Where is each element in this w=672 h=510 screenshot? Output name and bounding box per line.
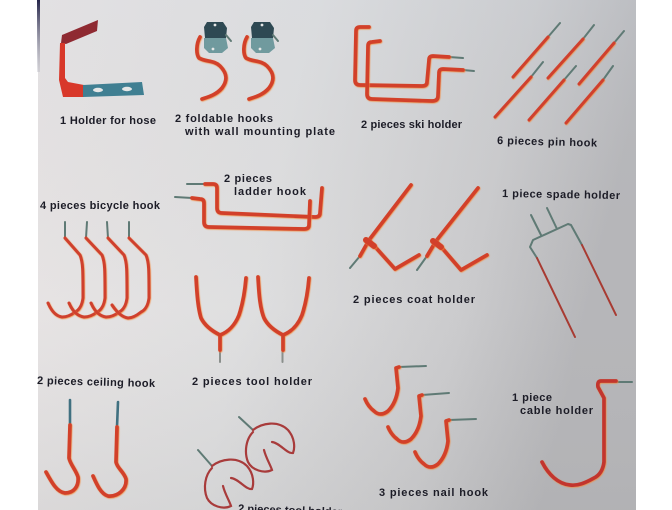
icon: holder for hose — [59, 20, 144, 97]
label: spade holder: 1 piece spade holder — [502, 188, 621, 202]
icon: ladder hooks — [175, 184, 322, 229]
icon: coat holders — [350, 185, 487, 270]
icon: spade holder — [530, 208, 616, 337]
icon: nail hooks — [365, 366, 476, 467]
icon: round tool hooks — [198, 417, 294, 508]
icon: pin hooks — [495, 23, 624, 123]
label: cable holder — [512, 392, 594, 417]
label: bicycle hook: 4 pieces bicycle hook — [40, 200, 161, 212]
label: foldable hooks: with wall mounting plate — [184, 126, 335, 138]
label: pin hook: 6 pieces pin hook — [497, 135, 598, 150]
icon: cable holder — [542, 381, 632, 485]
label: cable holder: 1 piece — [512, 392, 552, 404]
label: ladder hook — [224, 173, 307, 198]
label: cable holder: cable holder — [520, 405, 594, 417]
label: ski holder: 2 pieces ski holder — [361, 119, 463, 131]
label: nail hook: 3 pieces nail hook — [379, 487, 489, 499]
icon: bicycle hooks — [48, 222, 149, 318]
label: ladder hook: 2 pieces — [224, 173, 272, 185]
label: ladder hook: ladder hook — [234, 186, 307, 198]
icon: foldable hooks with plates — [197, 22, 278, 99]
icon: ceiling hooks — [46, 400, 126, 496]
label: coat holder: 2 pieces coat holder — [353, 294, 476, 306]
label: ceiling hook: 2 pieces ceiling hook — [37, 375, 156, 390]
icon: tool holders — [196, 277, 309, 362]
label: holder for hose: 1 Holder for hose — [60, 115, 156, 127]
label: foldable hooks: 2 foldable hooks — [175, 113, 273, 125]
label: foldable hooks — [175, 113, 335, 138]
icon: ski holders — [355, 27, 474, 101]
label: tool holder: 2 pieces tool holder — [192, 376, 313, 388]
